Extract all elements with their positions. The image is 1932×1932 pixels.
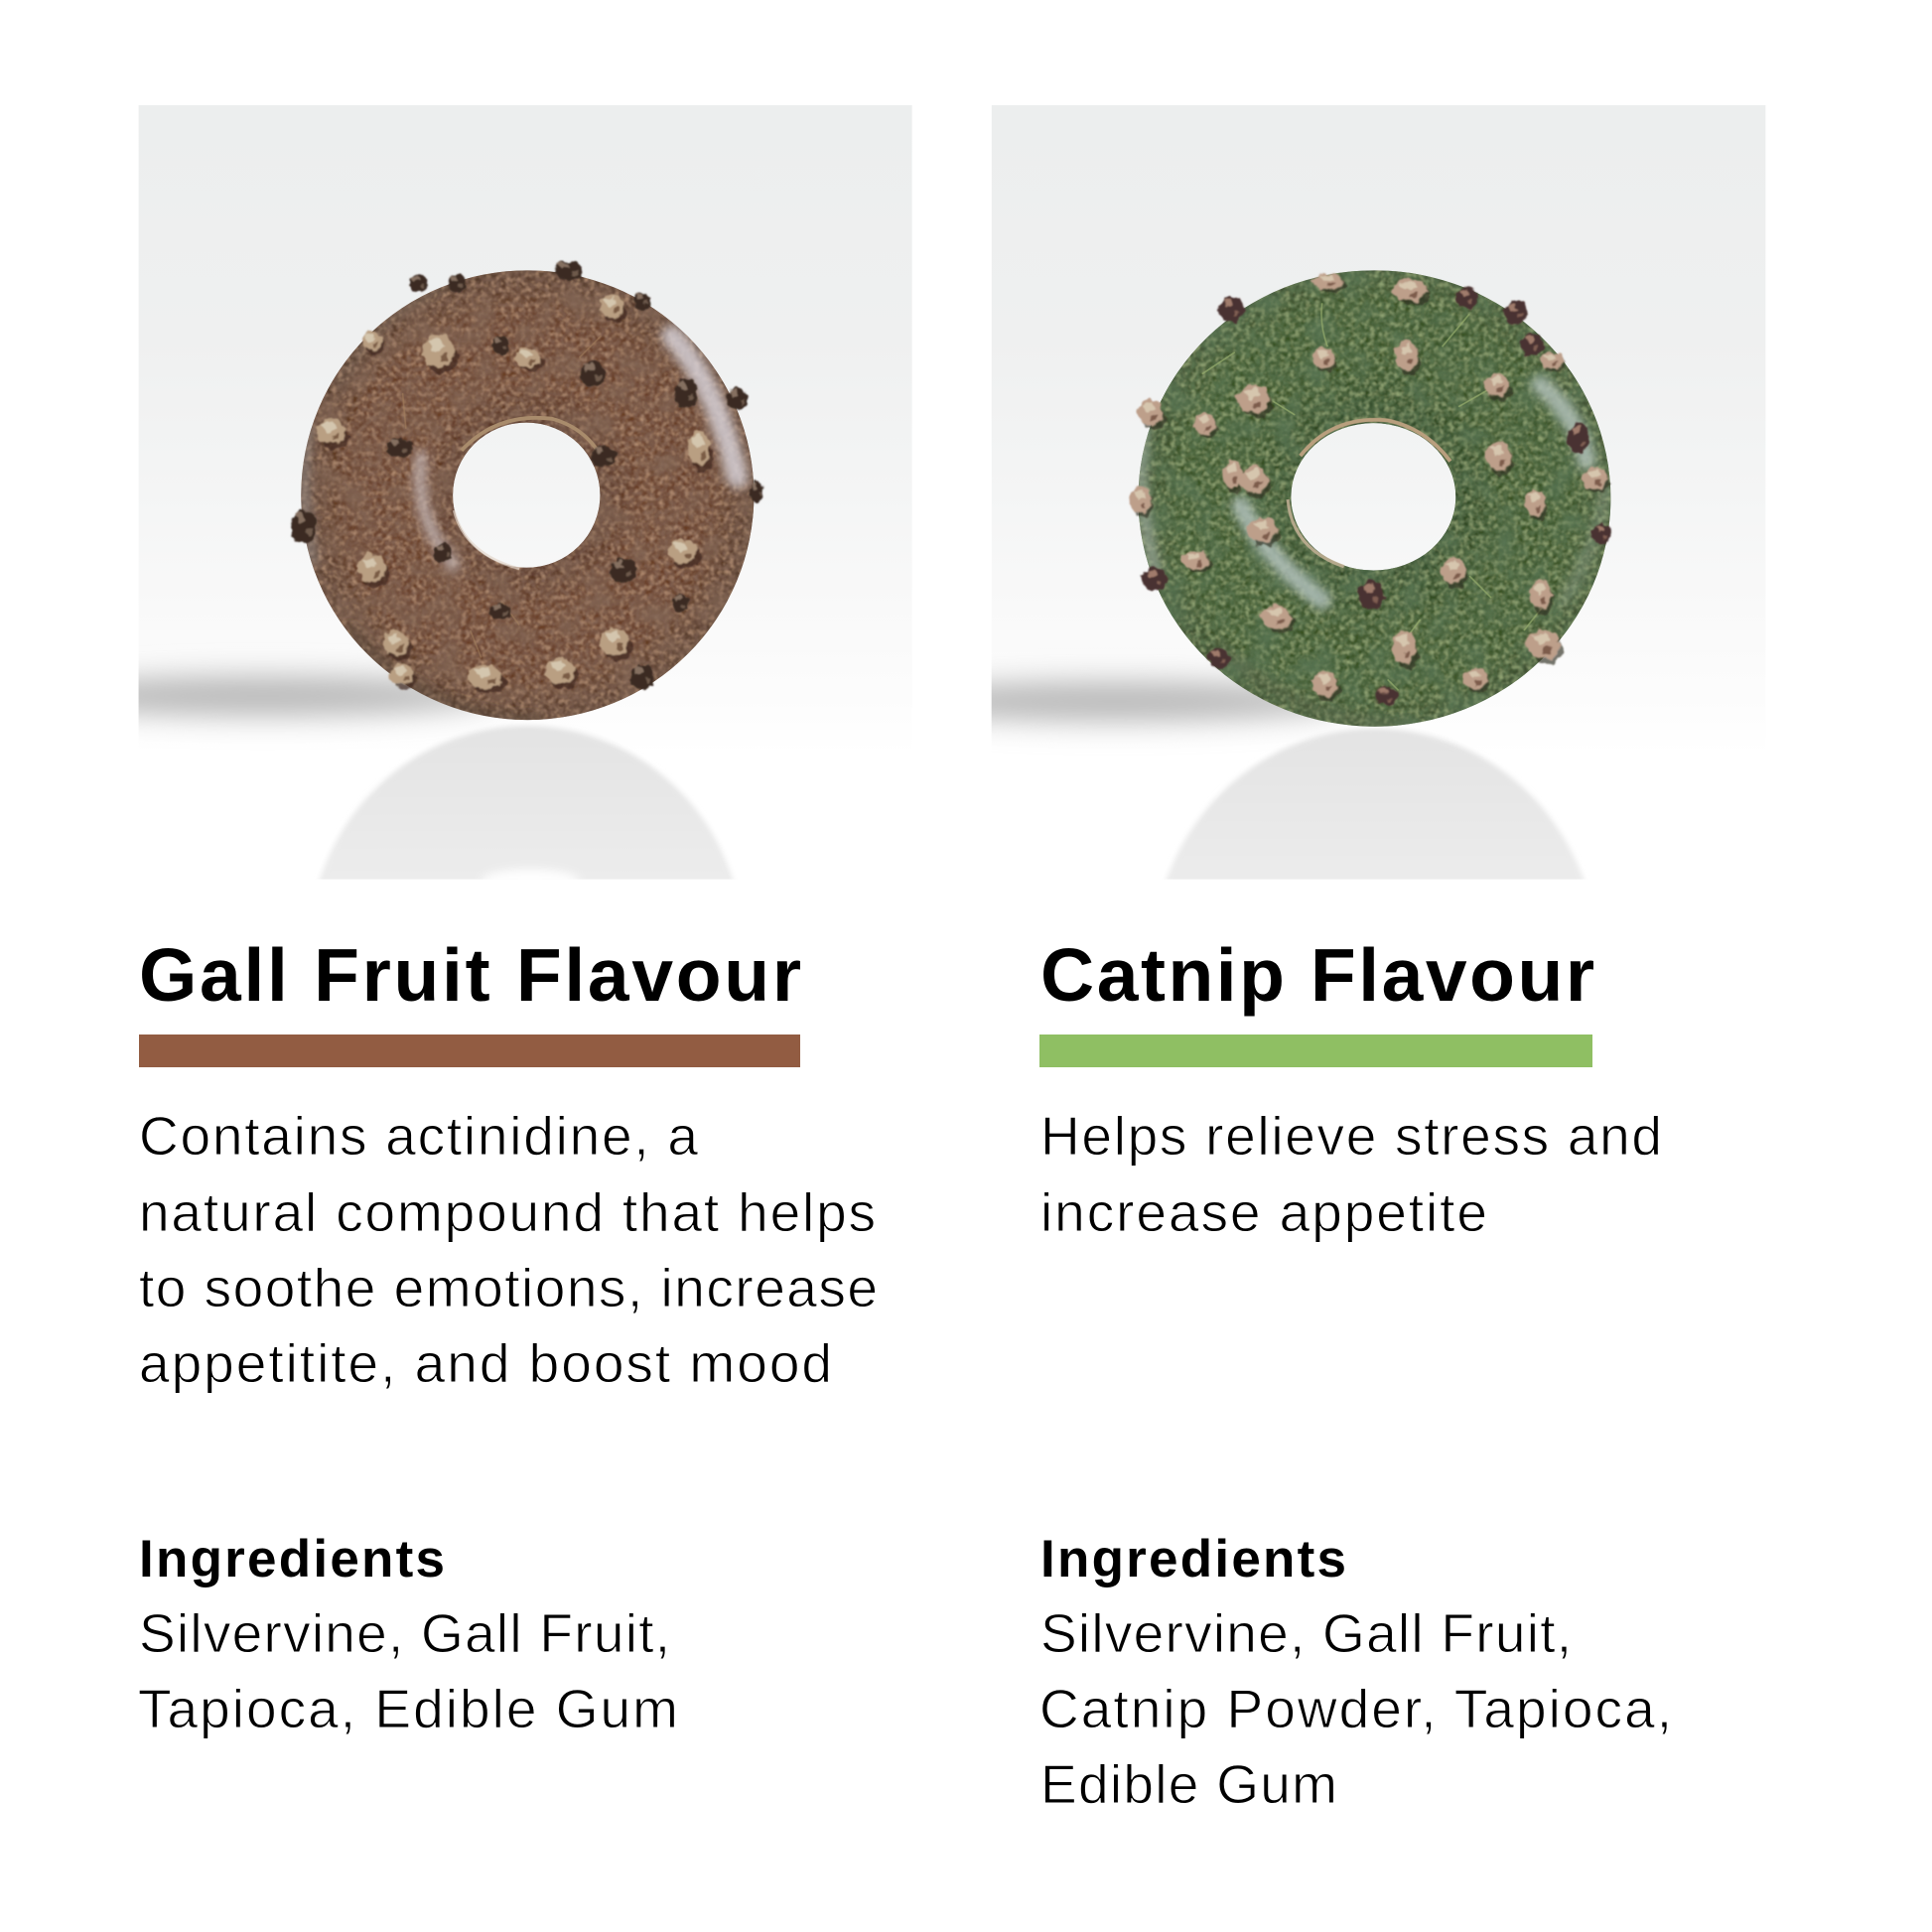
panel: gall fruit flavour <box>139 105 911 1738</box>
description: catnip: increase appetite <box>1040 1181 1487 1243</box>
ingredients: catnip: Catnip Powder, Tapioca, <box>1039 1678 1672 1739</box>
description: catnip <box>1040 1105 1662 1243</box>
description: gall fruit: to soothe emotions, increase <box>139 1257 878 1318</box>
panel: catnip flavour <box>991 105 1765 1803</box>
description: gall fruit <box>139 1105 878 1394</box>
heading: catnip flavour: Catnip Flavour <box>1040 933 1594 1017</box>
photo: green donut <box>991 105 1765 880</box>
ingredients: catnip <box>1039 1530 1672 1815</box>
ingredients: catnip: Ingredients <box>1040 1530 1346 1588</box>
description: gall fruit: appetitite, and boost mood <box>139 1332 832 1394</box>
ingredients: catnip: Edible Gum <box>1040 1753 1337 1815</box>
description: gall fruit: Contains actinidine, a <box>139 1105 698 1167</box>
green underline bar <box>1039 1035 1592 1067</box>
heading: gall fruit flavour: Gall Fruit Flavour <box>139 933 801 1017</box>
ingredients: gall fruit: Tapioca, Edible Gum <box>138 1678 678 1739</box>
ingredients: catnip: Silvervine, Gall Fruit, <box>1040 1602 1572 1664</box>
ingredients: gall fruit <box>138 1530 678 1739</box>
ingredients: gall fruit: Silvervine, Gall Fruit, <box>139 1602 670 1664</box>
description: gall fruit: natural compound that helps <box>139 1181 876 1243</box>
description: catnip: Helps relieve stress and <box>1040 1105 1662 1167</box>
brown underline bar <box>139 1035 800 1067</box>
infographic: flavour comparison <box>139 105 1765 1803</box>
ingredients: gall fruit: Ingredients <box>139 1530 445 1588</box>
photo: brown donut <box>139 105 911 880</box>
